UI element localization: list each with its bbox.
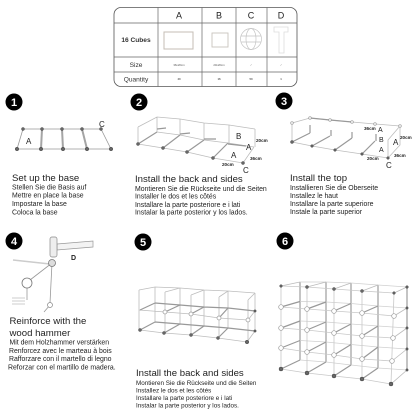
step 1 text: Coloca la base: [12, 210, 58, 216]
icon: panel A: [164, 32, 193, 49]
back and sides diagram: C: [243, 166, 249, 175]
top install diagram: A: [379, 147, 384, 154]
two level frame diagram: [138, 287, 256, 344]
badge 6: 6: [282, 236, 288, 248]
icon: hammer D: [274, 27, 288, 53]
table column headers: D: [278, 10, 285, 20]
step 4 text: Renforcez avec le marteau à bois: [9, 348, 112, 355]
back and sides diagram: A: [231, 151, 237, 160]
wood hammer diagram: D: [71, 255, 76, 262]
table values: 36x20cm: [173, 63, 185, 67]
step 5: [134, 234, 257, 410]
badge 2: 2: [136, 97, 142, 109]
step 1 text: Impostare la base: [12, 201, 67, 208]
step 3 text: Installare la parte superiore: [290, 201, 374, 208]
table values: [173, 63, 282, 81]
step 4 text: [8, 316, 116, 372]
top install diagram: A: [393, 138, 399, 147]
step 6: [276, 232, 408, 386]
step 2 text: [135, 174, 267, 216]
front frame: [281, 286, 394, 384]
step 2 text: Instalar la parte posterior y los lados.: [135, 210, 248, 216]
step 5 text: Installare la parte posteriore e i lati: [136, 395, 232, 402]
table column headers: [176, 10, 285, 20]
step 4 text: Mit dem Holzhammer verstärken: [10, 340, 109, 346]
badge 3: 3: [281, 96, 287, 108]
back and sides diagram: B: [236, 132, 241, 141]
step 2 text: Installer le dos et les côtés: [135, 194, 217, 200]
base diagram: C: [99, 120, 105, 129]
completed 16 cube rack: [279, 282, 408, 386]
table column headers: B: [216, 10, 222, 20]
step 3 text: Installez le haut: [290, 193, 338, 200]
step 5 text: Install the back and sides: [136, 368, 244, 379]
step 5 text: Montieren Sie die Rückseite und die Seiten: [136, 380, 257, 387]
step 1 text: [12, 173, 86, 216]
badge 1: 1: [11, 97, 17, 109]
step 4 text: wood hammer: [8, 328, 71, 339]
step 4: [6, 232, 116, 372]
joints: [280, 285, 282, 287]
icon: connector C: [240, 28, 262, 50]
depth rails: [281, 302, 378, 379]
parts table: [114, 8, 297, 86]
table values: 1: [280, 77, 282, 81]
table row headers: [121, 37, 151, 84]
top install diagram: 36cm: [364, 126, 376, 131]
badge 5: [134, 234, 152, 250]
step 3 text: Install the top: [290, 173, 347, 184]
icon: panel B: [212, 33, 228, 47]
step 1: [6, 94, 113, 216]
step 4 text: Reforzar con el martillo de madera.: [8, 364, 116, 372]
table values: 40: [177, 77, 181, 81]
step 3 text: Installieren Sie die Oberseite: [290, 185, 378, 192]
table values: 16: [217, 77, 221, 81]
back and sides diagram: 20cm: [256, 138, 268, 143]
table values: /: [281, 63, 282, 67]
top install diagram: 36cm: [394, 153, 406, 158]
step 2 text: Montieren Sie die Rückseite und die Seiten: [135, 186, 267, 193]
top install diagram: B: [379, 137, 384, 144]
back frame: [300, 282, 407, 370]
step 3 text: [290, 173, 378, 216]
step 5 text: Installez le dos et les côtés: [136, 388, 211, 394]
table values: 50: [249, 77, 253, 81]
base diagram: A: [26, 137, 32, 146]
top install diagram: [290, 117, 412, 170]
badge 4: 4: [11, 236, 18, 248]
table values: 20x20cm: [213, 63, 225, 67]
table row headers: 16 Cubes: [121, 37, 151, 44]
back and sides diagram: [136, 117, 268, 175]
back and sides diagram: 36cm: [250, 156, 262, 161]
step 1 text: Set up the base: [12, 173, 79, 184]
top install diagram: 20cm: [367, 156, 379, 161]
badge 5: 5: [140, 237, 146, 249]
top install diagram: 20cm: [400, 135, 412, 140]
table values: /: [251, 63, 252, 67]
top install diagram: A: [378, 127, 383, 134]
back and sides diagram: 20cm: [222, 162, 234, 167]
step 5 text: Instalar la parte posterior y los lados.: [136, 402, 239, 410]
step 1 text: Stellen Sie die Basis auf: [12, 184, 86, 192]
table column headers: C: [248, 10, 255, 20]
badge 6: [276, 232, 294, 250]
step 2 text: Install the back and sides: [135, 174, 243, 185]
table column headers: A: [176, 10, 182, 20]
step 4 text: Reinforce with the: [10, 316, 86, 327]
step 1 text: Mettre en place la base: [12, 192, 84, 200]
back and sides diagram: A: [246, 143, 252, 152]
step 5 text: [136, 368, 257, 410]
table row headers: Quantity: [124, 76, 149, 84]
step 2: [130, 94, 268, 216]
table row headers: Size: [130, 62, 143, 69]
step 3 text: Instale la parte superior: [290, 209, 363, 216]
top install diagram: C: [386, 161, 392, 170]
step 3: [276, 92, 412, 216]
step 2 text: Installare la parte posteriore e i lati: [135, 202, 241, 209]
step 4 text: Rafforzare con il martello di legno: [9, 356, 112, 363]
base diagram: [15, 120, 113, 151]
